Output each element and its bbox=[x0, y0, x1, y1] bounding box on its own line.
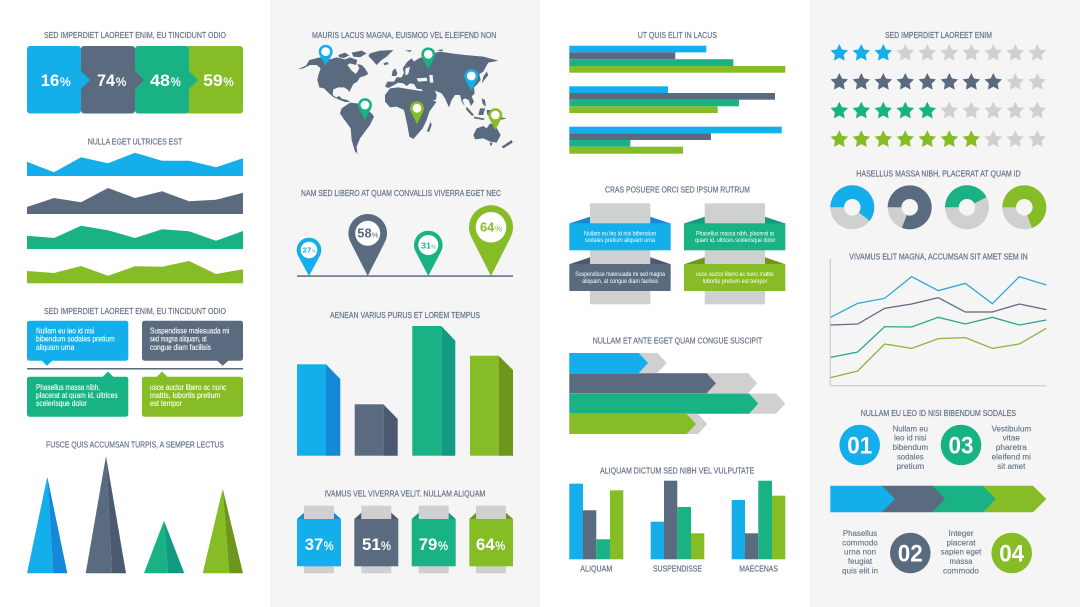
percentage arrow blocks: 48 bbox=[150, 71, 170, 90]
ribbon: green: quam id, ultrices scelerisque dolor bbox=[695, 237, 776, 244]
heading: world map: MAURIS LACUS MAGNA, EUISMOD VEL ELEIFEND NON bbox=[312, 30, 496, 40]
percentage arrow blocks: 16 bbox=[41, 71, 59, 90]
step 04 text: massa bbox=[950, 556, 973, 566]
step 03 text: pharetra bbox=[996, 442, 1027, 452]
heading: area charts: NULLA EGET ULTRICES EST bbox=[88, 137, 183, 147]
column chart bbox=[569, 481, 785, 573]
heading: line chart: VIVAMUS ELIT MAGNA, ACCUMSAN SIT AMET SEM IN bbox=[849, 252, 1028, 262]
step 02 text: quis elit in bbox=[842, 565, 878, 575]
star rating: row 2 bbox=[831, 73, 1046, 90]
tag block: 51% bbox=[354, 506, 398, 573]
step 01: 01 bbox=[847, 432, 872, 460]
ribbon blocks bbox=[569, 203, 785, 304]
timeline callouts bbox=[27, 321, 243, 417]
tag block: 37% bbox=[297, 506, 341, 573]
star rating: row 1 bbox=[831, 44, 1046, 61]
ribbon: lime: usce auctor libero ac nunc mattis bbox=[696, 271, 774, 278]
callout: green bbox=[27, 372, 128, 417]
callout: slate: congue diam facilisis bbox=[150, 343, 211, 352]
map pin: blue bbox=[319, 45, 333, 66]
step 01 text: pretium bbox=[896, 461, 924, 471]
line chart bbox=[830, 259, 1046, 386]
step 03 bbox=[941, 425, 981, 465]
pin: 64%: % bbox=[495, 225, 502, 234]
ribbon: slate: aliquam, at congue diam facilisis bbox=[582, 278, 658, 285]
percentage arrow blocks bbox=[27, 46, 243, 114]
panel: column 4 bbox=[830, 30, 1046, 575]
step 02 text bbox=[842, 528, 878, 575]
callout: green: placerat at quam id, ultrices bbox=[36, 391, 118, 400]
callout: slate: Suspendisse malesuada mi bbox=[150, 326, 230, 336]
heading: tag blocks: IVAMUS VEL VIVERRA VELIT. NULLAM ALIQUAM bbox=[325, 489, 485, 499]
heading: horizontal bars: UT QUIS ELIT IN LACUS bbox=[638, 30, 717, 40]
panel background: column 4 bbox=[810, 0, 1080, 607]
step 02 text: commodo bbox=[842, 537, 878, 547]
heading: stars: SED IMPERDIET LAOREET ENIM bbox=[885, 30, 992, 40]
tag block: 79% bbox=[412, 506, 456, 573]
3D bar chart bbox=[297, 326, 513, 456]
step 03 text bbox=[991, 423, 1031, 471]
step 02: 02 bbox=[898, 540, 923, 568]
ribbon: blue bbox=[569, 223, 671, 250]
heading: donuts: HASELLUS MASSA NIBH, PLACERAT AT QUAM ID bbox=[856, 169, 1021, 179]
donut: slate bbox=[888, 185, 932, 229]
step 02 text: feugiat bbox=[848, 556, 873, 566]
star rating: row 3 bbox=[831, 102, 1046, 118]
callout: lime bbox=[142, 372, 243, 417]
step 04 text: placerat bbox=[946, 537, 976, 547]
ribbon: lime: lobortis pretium est tempor bbox=[703, 278, 768, 285]
callout: blue: bibendum sodales pretium bbox=[36, 335, 115, 344]
pin: 27%: % bbox=[312, 248, 316, 253]
map pin: lime australia bbox=[488, 108, 502, 130]
column chart: MAECENAS bbox=[739, 563, 778, 573]
step 04 text: Integer bbox=[948, 528, 974, 538]
step 01 bbox=[839, 425, 880, 465]
panel: column 1 bbox=[27, 30, 243, 573]
step 02 text: Phasellus bbox=[843, 528, 877, 538]
ribbon: green: Phasellus massa nibh, placerat at bbox=[696, 230, 774, 238]
callout: lime: mattis, lobortis pretium bbox=[150, 391, 220, 400]
tag block: 37%: % bbox=[324, 539, 334, 553]
tag block: 51%: 51 bbox=[362, 535, 381, 554]
heading: column chart: ALIQUAM DICTUM SED NIBH VEL VULPUTATE bbox=[600, 465, 755, 475]
callout: lime: est tempor bbox=[150, 399, 182, 408]
ribbon: green bbox=[684, 223, 785, 250]
tag block: 64% bbox=[469, 506, 513, 573]
callout: blue bbox=[27, 321, 128, 366]
progress arrows bbox=[569, 353, 785, 434]
map pin: green south bbox=[358, 98, 372, 120]
heading: progress arrows: NULLAM ET ANTE EGET QUAM CONGUE SUSCIPIT bbox=[593, 335, 763, 345]
map pin: green north bbox=[421, 47, 435, 69]
ribbon: blue: Nullam eu leo id nisi bibendum bbox=[584, 230, 656, 238]
callout: green: scelerisque dolor bbox=[36, 399, 87, 408]
horizontal bar chart bbox=[569, 46, 785, 154]
ribbon: slate: Suspendisse malesuada mi sed magna bbox=[575, 271, 665, 278]
pin: 58% bbox=[348, 214, 387, 276]
ribbon: slate bbox=[569, 264, 671, 291]
callout: blue: Nullam eu leo id nisi bbox=[36, 326, 95, 336]
step 03 text: Vestibulum bbox=[991, 423, 1031, 433]
map pin: lime africa bbox=[410, 101, 424, 124]
heading: numbered steps: NULLAM EU LEO ID NISI BIBENDUM SODALES bbox=[861, 408, 1016, 418]
pin: 64% bbox=[469, 205, 513, 276]
area charts bbox=[27, 153, 243, 283]
step 01 text bbox=[892, 423, 928, 471]
tag block: 79%: % bbox=[438, 539, 448, 553]
percentage arrow blocks: 74 bbox=[97, 71, 116, 90]
map pin: blue east bbox=[464, 69, 478, 91]
percentage arrow blocks: % bbox=[223, 75, 234, 89]
pin: 27% bbox=[297, 238, 321, 276]
step 04 bbox=[991, 533, 1032, 573]
step 02 bbox=[890, 533, 931, 573]
percentage arrow blocks: % bbox=[116, 75, 127, 89]
percentage arrow blocks: 59 bbox=[203, 71, 223, 90]
percentage arrow blocks: % bbox=[60, 75, 71, 89]
heading: triangles: FUSCE QUIS ACCUMSAN TURPIS, A SEMPER LECTUS bbox=[46, 440, 224, 450]
step 01 text: Nullam eu bbox=[893, 423, 928, 433]
callout: green: Phasellus massa nibh, bbox=[36, 383, 100, 392]
pin chart bbox=[297, 205, 513, 277]
panel: column 2 bbox=[297, 30, 513, 573]
panel: column 3 bbox=[569, 30, 785, 573]
heading: percentage blocks: SED IMPERDIET LAOREET ENIM, EU TINCIDUNT ODIO bbox=[44, 30, 226, 40]
callout: slate: sed magna aliquam, at bbox=[150, 335, 207, 344]
step 03: 03 bbox=[948, 432, 974, 460]
heading: ribbons: CRAS POSUERE ORCI SED IPSUM RUTRUM bbox=[605, 185, 750, 195]
step 01 text: sodales bbox=[897, 451, 924, 461]
ribbon: blue: sodales pretium aliquam urna bbox=[585, 237, 655, 244]
step 02 text: urna non bbox=[844, 547, 876, 557]
step 04 text bbox=[941, 528, 982, 575]
step 01 text: bibendum bbox=[892, 442, 928, 452]
pin: 64%: 64 bbox=[480, 220, 495, 235]
tag block: 37%: 37 bbox=[305, 535, 323, 554]
pin: 58%: 58 bbox=[357, 226, 372, 240]
heading: callouts: SED IMPERDIET LAOREET ENIM, EU TINCIDUNT ODIO bbox=[44, 306, 226, 316]
column chart: ALIQUAM bbox=[580, 563, 612, 573]
donut: blue bbox=[830, 185, 874, 229]
panel background: column 2 bbox=[270, 0, 540, 607]
pin: 27%: 27 bbox=[303, 247, 311, 254]
pin: 31%: % bbox=[431, 244, 436, 250]
tag block: 79%: 79 bbox=[419, 535, 437, 554]
step 03 text: sit amet bbox=[997, 461, 1026, 471]
column chart: SUSPENDISSE bbox=[653, 563, 702, 573]
world map bbox=[297, 49, 513, 155]
heading: pins: NAM SED LIBERO AT QUAM CONVALLIS VIVERRA EGET NEC bbox=[301, 188, 501, 198]
step 04 text: commodo bbox=[943, 565, 979, 575]
triangle chart bbox=[27, 456, 243, 573]
donut: lime bbox=[1002, 185, 1046, 229]
star rating: row 4 bbox=[831, 130, 1046, 147]
donut: green bbox=[945, 185, 989, 229]
step arrow band bbox=[830, 486, 1046, 512]
callout: blue: aliquam urna bbox=[36, 343, 75, 352]
step 04: 04 bbox=[999, 540, 1025, 568]
tag block: 51%: % bbox=[381, 539, 391, 553]
ribbon: lime bbox=[684, 264, 785, 291]
pin: 31% bbox=[414, 231, 443, 276]
callout: slate bbox=[142, 321, 243, 366]
heading: 3D bars: AENEAN VARIUS PURUS ET LOREM TEMPUS bbox=[330, 310, 480, 320]
step 03 text: eleifend mi bbox=[992, 451, 1031, 461]
step 03 text: vitae bbox=[1003, 433, 1020, 443]
percentage arrow blocks: % bbox=[171, 75, 181, 89]
tag block: 64%: 64 bbox=[476, 535, 495, 554]
step 04 text: sapien eget bbox=[941, 547, 982, 557]
pin: 31%: 31 bbox=[421, 241, 431, 250]
callout: lime: usce auctor libero ac nunc bbox=[150, 383, 226, 392]
step 01 text: leo id nisi bbox=[894, 433, 927, 443]
pin: 58%: % bbox=[372, 230, 379, 240]
tag block: 64%: % bbox=[495, 539, 506, 553]
